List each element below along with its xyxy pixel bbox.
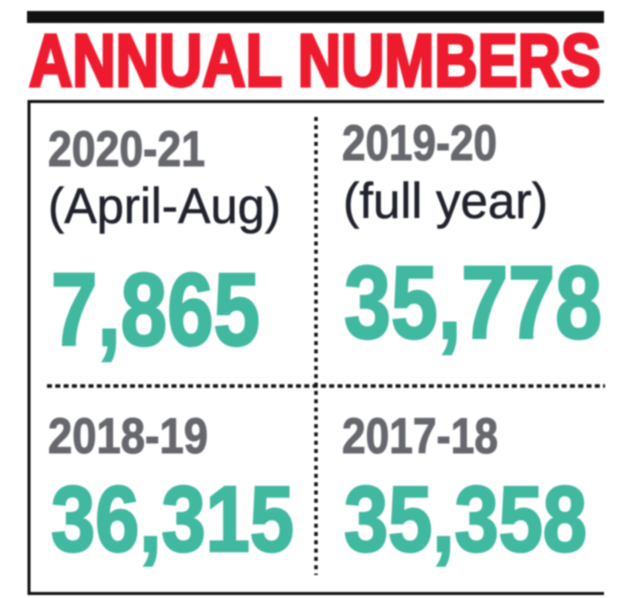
period label: 2019-20 — [342, 115, 497, 171]
period note: (full year) — [343, 173, 548, 229]
period label: 2017-18 — [342, 408, 498, 464]
value: 36,315 — [51, 467, 294, 571]
period label: 2020-21 — [48, 121, 205, 177]
value: 7,865 — [51, 252, 260, 367]
cell: 2018-19 — [48, 408, 294, 571]
period label: 2018-19 — [48, 408, 208, 464]
cell: 2019-20 — [342, 115, 602, 360]
cell: 2017-18 — [342, 408, 587, 571]
period note: (April-Aug) — [48, 178, 281, 234]
table frame — [29, 102, 604, 594]
top black bar — [27, 11, 604, 23]
cell: 2020-21 — [48, 121, 281, 367]
value: 35,358 — [344, 467, 587, 571]
